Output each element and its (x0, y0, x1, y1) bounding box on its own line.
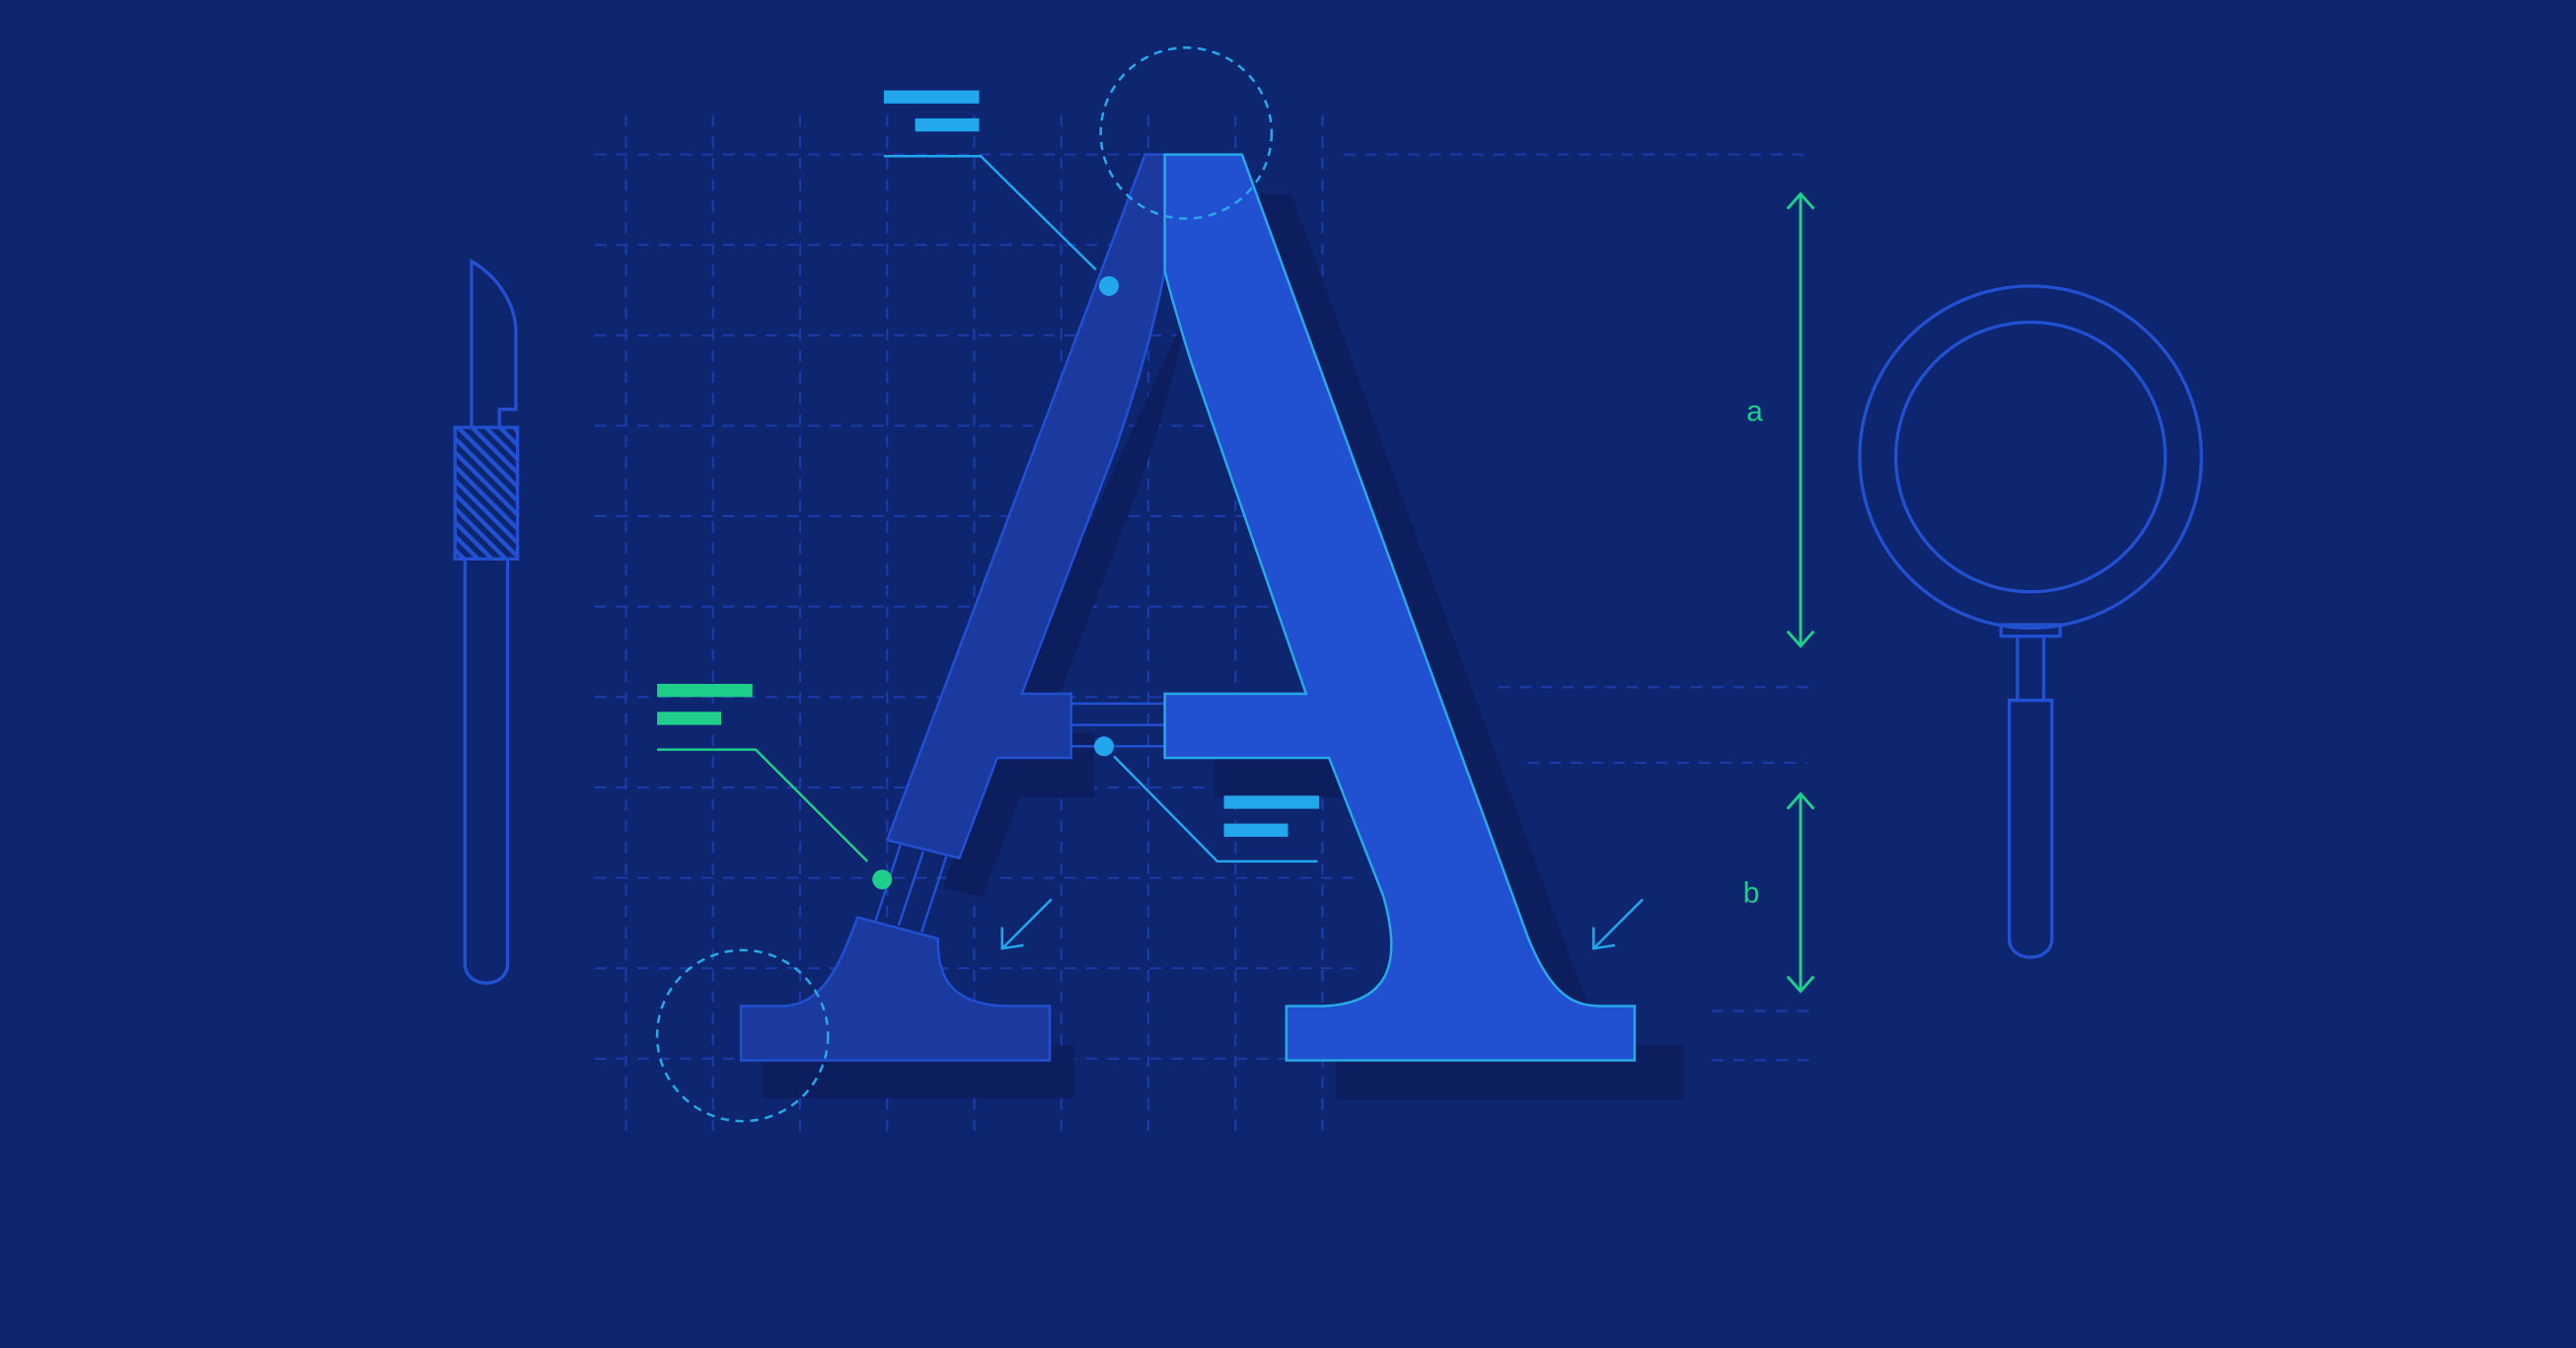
icon: magnifier (1860, 286, 2201, 957)
label b: b (1743, 877, 1759, 910)
letter A shadow (763, 194, 1684, 1099)
arrow right small (1593, 899, 1643, 948)
leg connectors (876, 704, 1165, 933)
callout crossbar (1094, 736, 1319, 861)
left stroke (887, 155, 1165, 859)
dashed circle top (1101, 47, 1272, 219)
right stroke (1165, 155, 1635, 1060)
callout green (657, 684, 892, 889)
arrow left small (1002, 899, 1052, 948)
dimension b (1788, 794, 1813, 992)
left foot (741, 918, 1050, 1060)
callout top (884, 91, 1119, 296)
letter A (741, 155, 1635, 1060)
dimension a (1788, 194, 1813, 646)
icon: craft knife (455, 262, 518, 983)
label a: a (1746, 395, 1763, 427)
dashed circle bottom (657, 950, 828, 1121)
